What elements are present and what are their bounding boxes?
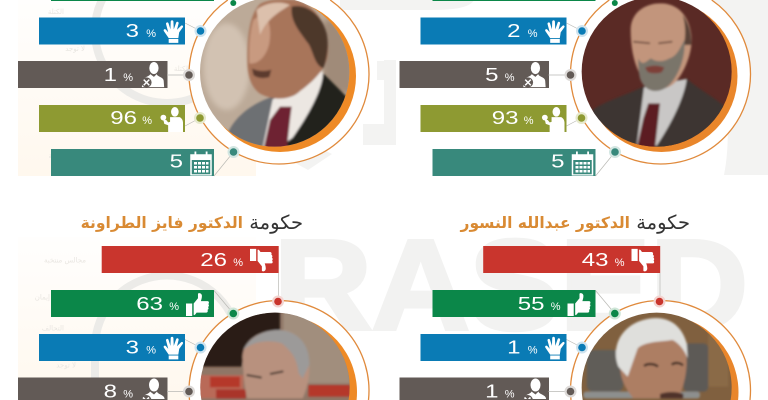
panel: Abdullah Ensour government [400,246,750,400]
bar: abstain blue [39,18,206,44]
dot: green [230,0,236,6]
watermark: top shapes [290,0,768,175]
portrait: photo [577,0,737,150]
portrait frame [189,301,369,400]
bar: absent grey [400,378,576,400]
bar: speakers olive: 96 [110,108,137,128]
bar: rejected sliver [432,0,596,1]
ghost labels: الكتلة [48,8,64,16]
title: government of Faez Tarawneh: حكومة [249,211,303,234]
bar: absent grey: % [505,72,515,84]
bar: rejected sliver [51,0,214,1]
bar: no confidence red: % [615,257,625,269]
bar: duration teal: 5 [170,151,183,172]
bar: no confidence red: 43 [582,250,608,270]
title: government of Faez Tarawneh: الدكتور فايز الطراونة [81,214,243,232]
bar: confidence green [51,290,239,320]
panel: Faez Tarawneh government [18,246,369,400]
bar: absent grey [400,61,576,88]
bar: abstain blue: 1 [507,337,520,358]
bar: abstain blue [420,18,588,44]
bar: abstain blue [39,334,206,361]
ghost labels [35,256,86,370]
portrait: photo [577,310,737,400]
ghost labels: الثقة [49,152,62,160]
bar: abstain blue: 3 [126,21,139,41]
bar: no confidence red: % [233,257,243,269]
ghost labels: إيمان [35,294,50,302]
bar: no confidence red [483,246,666,308]
bar: abstain blue [420,334,588,361]
ghost labels: لا توجد [56,362,76,370]
portrait: photo [197,310,357,400]
bar: speakers olive [39,105,206,132]
bar: abstain blue: % [528,28,538,40]
bar: absent grey: 1 [104,65,117,85]
ghost labels: التحالف [42,324,64,332]
ghost ring [95,0,239,103]
bar: no confidence red: 26 [200,250,227,270]
bar: abstain blue: 2 [507,21,520,41]
panel: Omar Razzaz government [400,0,750,176]
portrait frame [189,0,369,164]
bar: speakers olive: % [142,115,152,127]
portrait frame [570,0,750,164]
title: government of Faez Tarawneh [81,211,303,234]
bar: no confidence red [102,246,284,308]
bar: speakers olive: % [524,115,534,127]
title: government of Abdullah Ensour [460,211,690,234]
bar: duration teal: 5 [551,151,565,172]
panel background: top left [18,0,256,176]
ghost labels: الكتلة [174,65,190,73]
bar: absent grey [18,378,195,400]
bar: confidence green [432,290,621,320]
ghost labels [48,8,190,160]
bar: confidence green: % [551,301,561,313]
bar: absent grey: 5 [485,65,499,85]
ghost ring [95,276,239,400]
title: government of Abdullah Ensour: الدكتور عبدالله النسور [460,214,630,232]
bar: absent grey: % [123,72,133,84]
bar: abstain blue: 3 [126,337,139,358]
watermark: RASED: RASED [274,214,748,357]
bar: confidence green: 63 [136,294,163,314]
bar: confidence green: % [169,301,179,313]
bar: abstain blue: % [146,28,156,40]
title: government of Abdullah Ensour: حكومة [636,211,690,234]
panel background: bottom left [18,237,256,400]
bar: confidence green: 55 [518,294,545,314]
bar: speakers olive: 93 [492,108,518,128]
dot: green [612,0,618,6]
bar: duration teal [432,146,621,176]
ghost labels: مجالس منتخبة [44,256,86,264]
panel: Hani Mulki government [18,0,369,176]
portrait: photo [197,0,357,150]
portrait frame [570,301,750,400]
bar: abstain blue: % [528,344,538,356]
bar: absent grey [18,61,195,88]
ghost labels: لا توجد [65,45,85,53]
bar: speakers olive [420,105,588,132]
bar: duration teal [51,146,240,176]
bar: abstain blue: % [146,344,156,356]
